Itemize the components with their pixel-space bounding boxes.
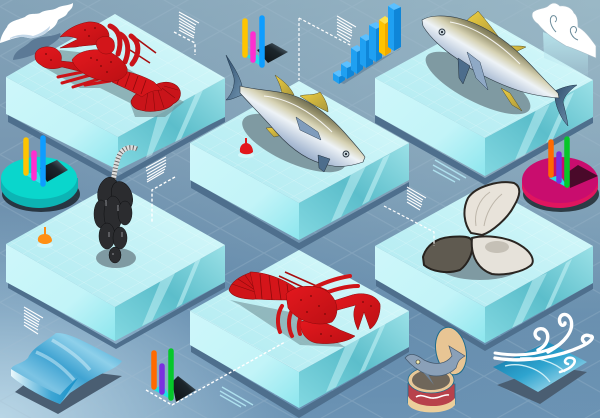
text lines middle right bbox=[407, 187, 426, 210]
icon: red lobster bottom center bbox=[229, 272, 380, 347]
dark shell bbox=[423, 237, 472, 272]
pectoral fin bbox=[296, 117, 321, 140]
dashed connector center left bbox=[152, 177, 175, 222]
lobster shadow bbox=[40, 50, 184, 117]
pectoral fins bbox=[458, 58, 470, 84]
carapace bbox=[286, 286, 337, 324]
canned fish bbox=[405, 346, 465, 376]
panel: ice block top center bbox=[190, 81, 409, 240]
block shadows bbox=[8, 115, 593, 418]
tail fan bbox=[131, 82, 180, 111]
wave front bbox=[11, 369, 78, 404]
carapace bbox=[72, 50, 127, 82]
lower fin bbox=[318, 155, 330, 172]
icon: red buoy bbox=[238, 138, 254, 158]
icon: bluefin tuna top right bbox=[418, 11, 577, 126]
lower claw bbox=[300, 320, 355, 344]
panel: ice block middle left bbox=[6, 183, 225, 341]
tail fin bbox=[226, 55, 245, 100]
chart: bars bottom center bbox=[152, 351, 196, 402]
dashed connector top left bbox=[174, 32, 195, 55]
walking legs lower bbox=[58, 70, 110, 87]
icon: white swirl cloud bbox=[532, 3, 596, 76]
light blue lines bottom bbox=[220, 387, 253, 407]
icon: tin can with fish bbox=[405, 324, 471, 412]
walking legs upper bbox=[110, 26, 138, 64]
mussels bbox=[94, 175, 137, 263]
icon: sea and wind tile bbox=[493, 314, 592, 404]
icon: bluefin tuna center bbox=[226, 55, 365, 184]
text lines and dashed connectors bbox=[24, 12, 434, 405]
icon: white cloud bbox=[0, 3, 73, 43]
sea tile bbox=[493, 342, 587, 392]
text lines center left bbox=[146, 157, 166, 182]
upper claw bbox=[60, 22, 109, 48]
wind swirls bbox=[495, 314, 592, 372]
light blue lines right bbox=[433, 160, 466, 182]
icon: mussels on rope bbox=[94, 148, 137, 268]
dashed connector bottom bbox=[146, 342, 285, 405]
can body bbox=[408, 383, 455, 411]
fish shadow bbox=[235, 102, 353, 184]
tail segments bbox=[250, 272, 296, 300]
icon: orange buoy bbox=[37, 227, 53, 248]
fish shadow bbox=[418, 40, 538, 126]
tail fan bbox=[229, 272, 258, 299]
antennae bbox=[279, 272, 330, 298]
lower claw bbox=[35, 47, 91, 73]
lobster shadow bbox=[230, 300, 345, 347]
panel: ice block top right bbox=[375, 18, 593, 176]
wave top bbox=[11, 333, 122, 404]
cloud shadow bbox=[13, 33, 61, 60]
panel: ice block middle right bbox=[375, 185, 593, 343]
walking legs lower bbox=[278, 306, 302, 336]
tail fin bbox=[553, 85, 577, 126]
wave shadow bbox=[15, 372, 122, 414]
chart: ascending isometric bar chart bbox=[333, 3, 401, 84]
chart: magenta disc bars bbox=[522, 139, 599, 212]
right shell bbox=[472, 236, 533, 275]
panel: ice block top left bbox=[6, 14, 225, 170]
oyster shadow bbox=[438, 250, 522, 280]
mussel shadow bbox=[96, 248, 136, 268]
text lines left bbox=[24, 307, 43, 334]
icon: oyster bbox=[423, 182, 533, 280]
open lid bbox=[431, 324, 471, 378]
belly fin bbox=[266, 127, 287, 137]
dorsal fins bbox=[275, 75, 294, 96]
icon: red lobster top left bbox=[35, 22, 184, 117]
chart: teal disc bars bbox=[1, 138, 80, 212]
anal fin bbox=[501, 88, 522, 111]
chart: bars top center bbox=[244, 18, 288, 67]
tail segments bbox=[112, 70, 162, 97]
upper shell bbox=[464, 182, 519, 235]
body bbox=[422, 16, 559, 98]
big right claw bbox=[330, 294, 380, 330]
eye bbox=[439, 29, 445, 35]
rope bbox=[113, 148, 137, 182]
panel: ice block bottom center bbox=[190, 250, 409, 408]
walking legs upper bbox=[310, 276, 358, 296]
body bbox=[240, 86, 365, 166]
eye bbox=[343, 151, 349, 157]
text lines top middle bbox=[337, 16, 356, 42]
icon: blue wave tile bbox=[11, 333, 122, 414]
head bbox=[96, 36, 115, 54]
can rim bbox=[408, 367, 454, 393]
dashed connector middle right bbox=[384, 206, 434, 246]
dorsal fins bbox=[466, 11, 502, 42]
tile shadow bbox=[497, 366, 587, 404]
dashed connector top middle bbox=[299, 18, 352, 80]
antennae bbox=[130, 36, 156, 63]
text lines top left bbox=[179, 12, 199, 38]
